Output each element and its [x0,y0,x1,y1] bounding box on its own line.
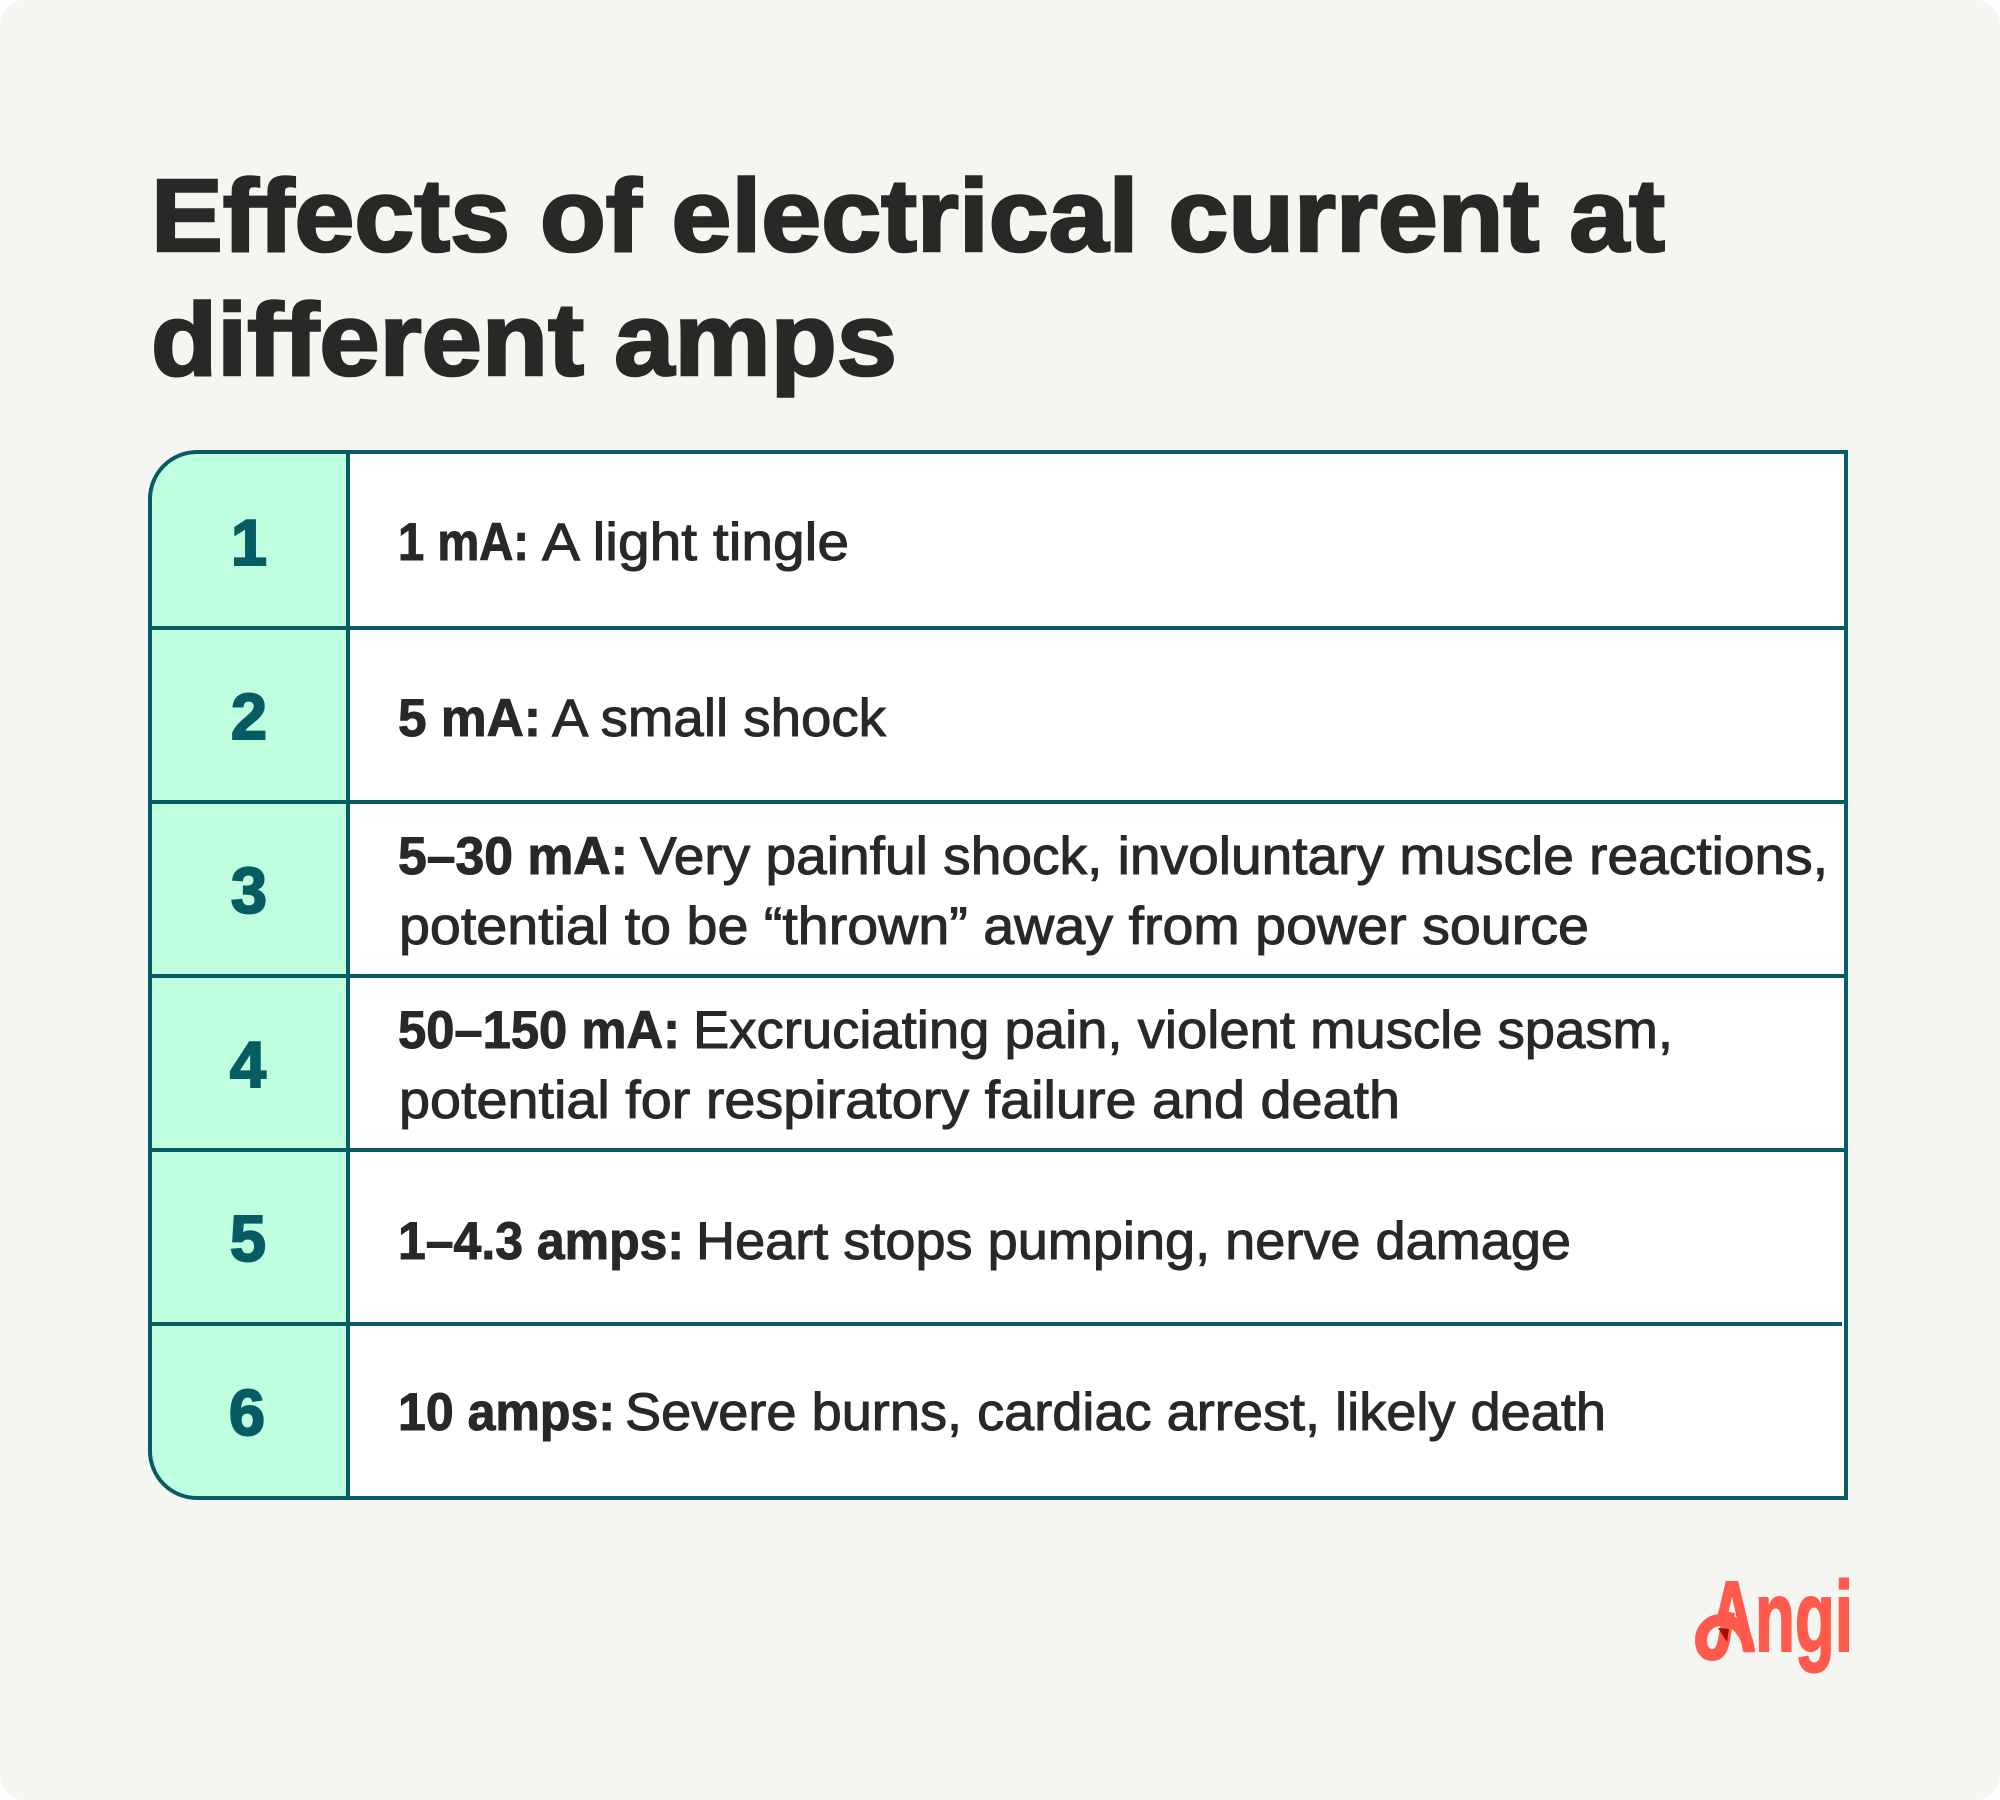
table grid [150,452,1846,1498]
row 3: 3 [231,854,267,927]
row 4: 50–150 mA: [398,1001,680,1060]
title: different amps [151,282,897,397]
row 6 [229,1376,1606,1449]
row 4: Excruciating pain, violent muscle spasm, [693,1001,1673,1060]
title [151,158,1665,397]
row 5 [230,1202,1571,1275]
row 1: 1 [231,506,267,579]
row 4: potential for respiratory failure and death [399,1071,1400,1130]
title: Effects of electrical current at [151,158,1665,273]
row 3: Very painful shock, involuntary muscle reactions, [640,827,1828,886]
row 3: 5–30 mA: [398,827,628,886]
row 2: 5 mA: [398,689,541,748]
logo: Angi: A [1708,1561,1756,1673]
row 1: A light tingle [542,513,849,572]
logo: Angi [1695,1578,1850,1674]
row 4 [230,1001,1673,1130]
row 6: 6 [229,1376,265,1449]
row 3: potential to be “thrown” away from power source [399,897,1589,956]
row 2: A small shock [552,689,887,748]
row 2 [231,680,887,753]
row 5: 1–4.3 amps: [398,1212,684,1271]
row 5: 5 [230,1202,266,1275]
row 1 [231,506,849,579]
row 6: Severe burns, cardiac arrest, likely death [625,1383,1606,1442]
number column [150,452,348,1498]
row 6: 10 amps: [398,1383,615,1442]
row 2: 2 [231,680,267,753]
logo: Angi: ngi [1755,1561,1853,1673]
row 5: Heart stops pumping, nerve damage [696,1212,1571,1271]
row 3 [231,827,1828,956]
row 1: 1 mA: [398,513,529,572]
table background [150,452,1846,1498]
row 4: 4 [230,1028,266,1101]
table panel [150,452,1846,1498]
